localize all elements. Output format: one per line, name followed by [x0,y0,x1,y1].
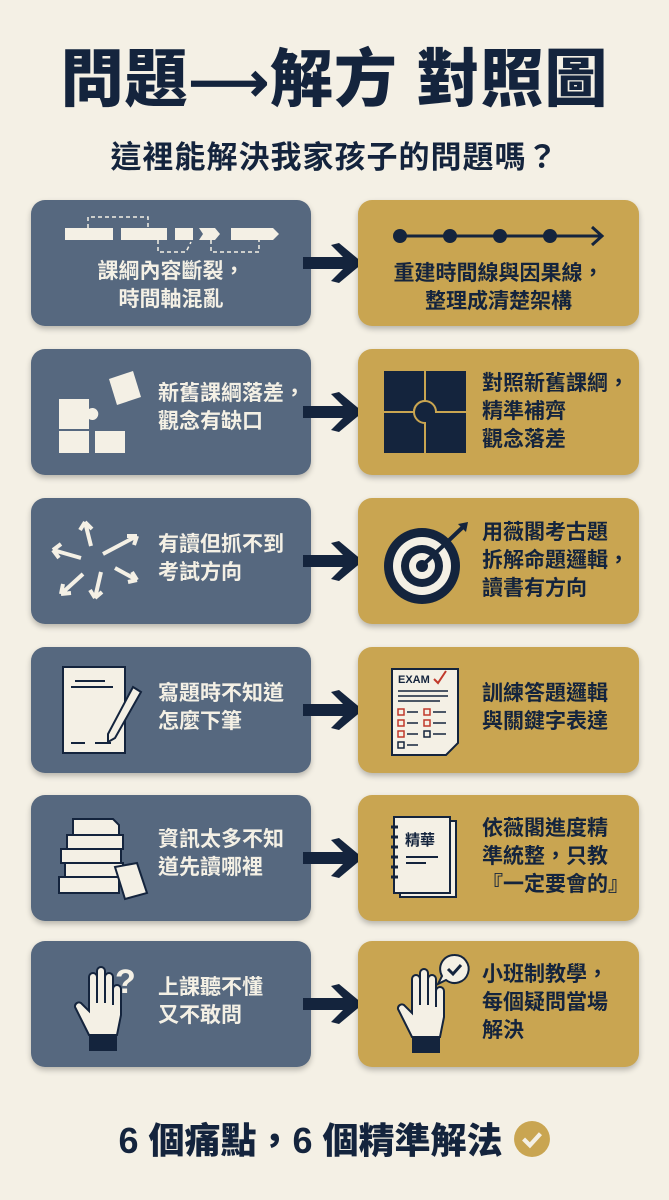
text: 資訊太多不知 [158,828,284,851]
icon: target [384,522,468,604]
panel: problem 5 [31,795,311,921]
panel: solution 1 [358,200,639,326]
panel: problem 3 [31,498,311,624]
icon: puzzle pieces [59,371,141,453]
title: 問題⟶解方 對照圖 [61,45,608,115]
icon: scattered arrows [52,520,139,600]
arrow 5 [303,838,358,878]
text: 有讀但抓不到 [158,533,284,556]
icon: solved puzzle [384,371,466,453]
text: 考試方向 [158,561,242,584]
text: 觀念有缺口 [158,410,263,433]
arrow 1 [303,243,358,283]
text: 『一定要會的』 [482,873,629,896]
text: 依薇閣進度精 [482,817,608,840]
icon: exam sheet: EXAM [398,674,430,686]
icon: raised hand with question [74,963,136,1051]
text [482,520,629,600]
text [158,532,284,584]
icon: timeline [393,226,604,246]
text: 又不敢問 [158,1004,242,1027]
text: 新舊課綱落差， [158,382,305,405]
text: 怎麼下筆 [158,710,242,733]
text [482,962,608,1042]
text [158,382,305,433]
text: 與關鍵字表達 [482,710,608,733]
text [482,816,629,896]
panel: solution 6 [358,941,639,1067]
icon: book stack [58,818,148,900]
panel: solution 4 [358,647,639,773]
icon: notebook: 精華 [405,829,435,850]
text: 上課聽不懂 [158,976,263,999]
text [98,260,244,311]
text: 時間軸混亂 [118,288,224,311]
icon: broken timeline [65,216,279,253]
text: 讀書有方向 [482,577,587,600]
arrow 4 [303,690,358,730]
icon: hand with check bubble [396,954,470,1053]
text: 重建時間線與因果線， [394,262,604,285]
panel: solution 3 [358,498,639,624]
subtitle: 這裡能解決我家孩子的問題嗎？ [110,140,558,175]
icon: raised hand with question: ? [115,963,136,1001]
text: 道先讀哪裡 [158,856,263,879]
text: 精準補齊 [482,400,566,423]
text: 拆解命題邏輯， [482,549,629,572]
panel: problem 2 [31,349,311,475]
arrow 6 [303,984,358,1024]
footer summary: 6 個痛點，6 個精準解法 [118,1120,503,1161]
text: 準統整，只教 [482,845,608,868]
text [158,828,284,879]
text [158,976,263,1027]
icon: notebook [391,816,457,898]
text [482,372,629,451]
text [394,262,604,313]
text: 訓練答題邏輯 [482,682,608,705]
panel: solution 5 [358,795,639,921]
text: 課綱內容斷裂， [98,260,244,283]
text: 觀念落差 [482,428,566,451]
panel: problem 6 [31,941,311,1067]
panel: solution 2 [358,349,639,475]
icon: exam sheet [391,668,459,756]
text: 整理成清楚架構 [425,290,572,313]
text: 對照新舊課綱， [482,372,629,395]
text: 每個疑問當場 [482,991,608,1014]
arrow 3 [303,541,358,581]
text [482,682,608,733]
text: 小班制教學， [482,963,608,986]
icon: paper and pen [62,666,142,754]
text [158,682,284,733]
arrow 2 [303,392,358,432]
text: 解決 [482,1019,524,1042]
panel: problem 1 [31,200,311,326]
text: 寫題時不知道 [158,682,284,705]
panel: problem 4 [31,647,311,773]
text: 用薇閣考古題 [482,521,608,544]
